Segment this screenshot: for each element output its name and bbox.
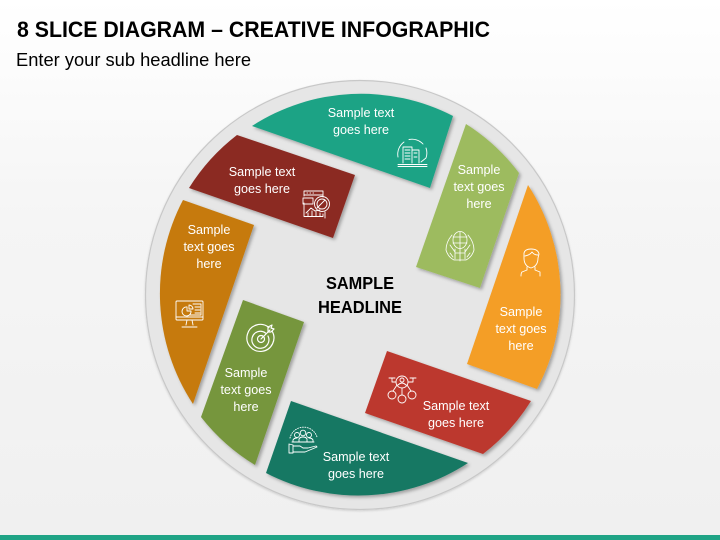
center headline: SAMPLE: [326, 273, 394, 293]
background disc: [146, 80, 574, 510]
red slice text: goes here: [428, 416, 484, 430]
orange slice text: here: [508, 339, 534, 353]
light green slice text: Sample: [458, 163, 500, 177]
brown orange slice text: text goes: [183, 240, 235, 254]
icon: brain: [446, 232, 474, 261]
olive slice text: text goes: [220, 383, 272, 397]
dark red slice text: [229, 165, 296, 196]
dark teal slice text: Sample text: [323, 450, 390, 464]
panel: light green slice: [416, 124, 519, 288]
light green slice text: [453, 163, 505, 211]
icon: monitor with chart: [176, 301, 203, 327]
title: 8 SLICE DIAGRAM – CREATIVE INFOGRAPHIC: [17, 17, 490, 42]
icon: people on a hand: [289, 427, 317, 453]
panel: orange slice: [467, 185, 561, 389]
orange slice text: text goes: [495, 322, 547, 336]
dark red slice text: goes here: [234, 182, 290, 196]
panel: dark red slice: [189, 135, 355, 238]
teal slice text: goes here: [333, 123, 389, 137]
icon: network of people: [388, 376, 416, 403]
olive slice text: here: [233, 400, 259, 414]
red slice text: [423, 399, 490, 430]
icon: person: [521, 249, 540, 276]
center headline: [318, 273, 402, 317]
light green slice text: here: [466, 197, 492, 211]
brown orange slice text: Sample: [188, 223, 230, 237]
olive slice text: [220, 366, 272, 414]
light green slice text: text goes: [453, 180, 505, 194]
panel: teal slice: [252, 94, 453, 188]
center headline: HEADLINE: [318, 297, 402, 317]
panel: brown orange slice: [160, 200, 254, 404]
subtitle: Enter your sub headline here: [16, 50, 251, 70]
brown orange slice text: [183, 223, 235, 271]
dark teal slice text: [323, 450, 390, 481]
icon: target: [247, 324, 274, 351]
panel: dark teal slice: [266, 401, 468, 496]
orange slice text: Sample: [500, 305, 542, 319]
panel: red slice: [365, 351, 531, 454]
teal slice text: Sample text: [328, 106, 395, 120]
icon: analytics report: [303, 191, 330, 218]
teal slice text: [328, 106, 395, 137]
dark red slice text: Sample text: [229, 165, 296, 179]
olive slice text: Sample: [225, 366, 267, 380]
red slice text: Sample text: [423, 399, 490, 413]
footer bar: [0, 535, 720, 540]
orange slice text: [495, 305, 547, 353]
panel: olive slice: [201, 300, 304, 465]
brown orange slice text: here: [196, 257, 222, 271]
dark teal slice text: goes here: [328, 467, 384, 481]
icon: city buildings: [398, 139, 427, 166]
